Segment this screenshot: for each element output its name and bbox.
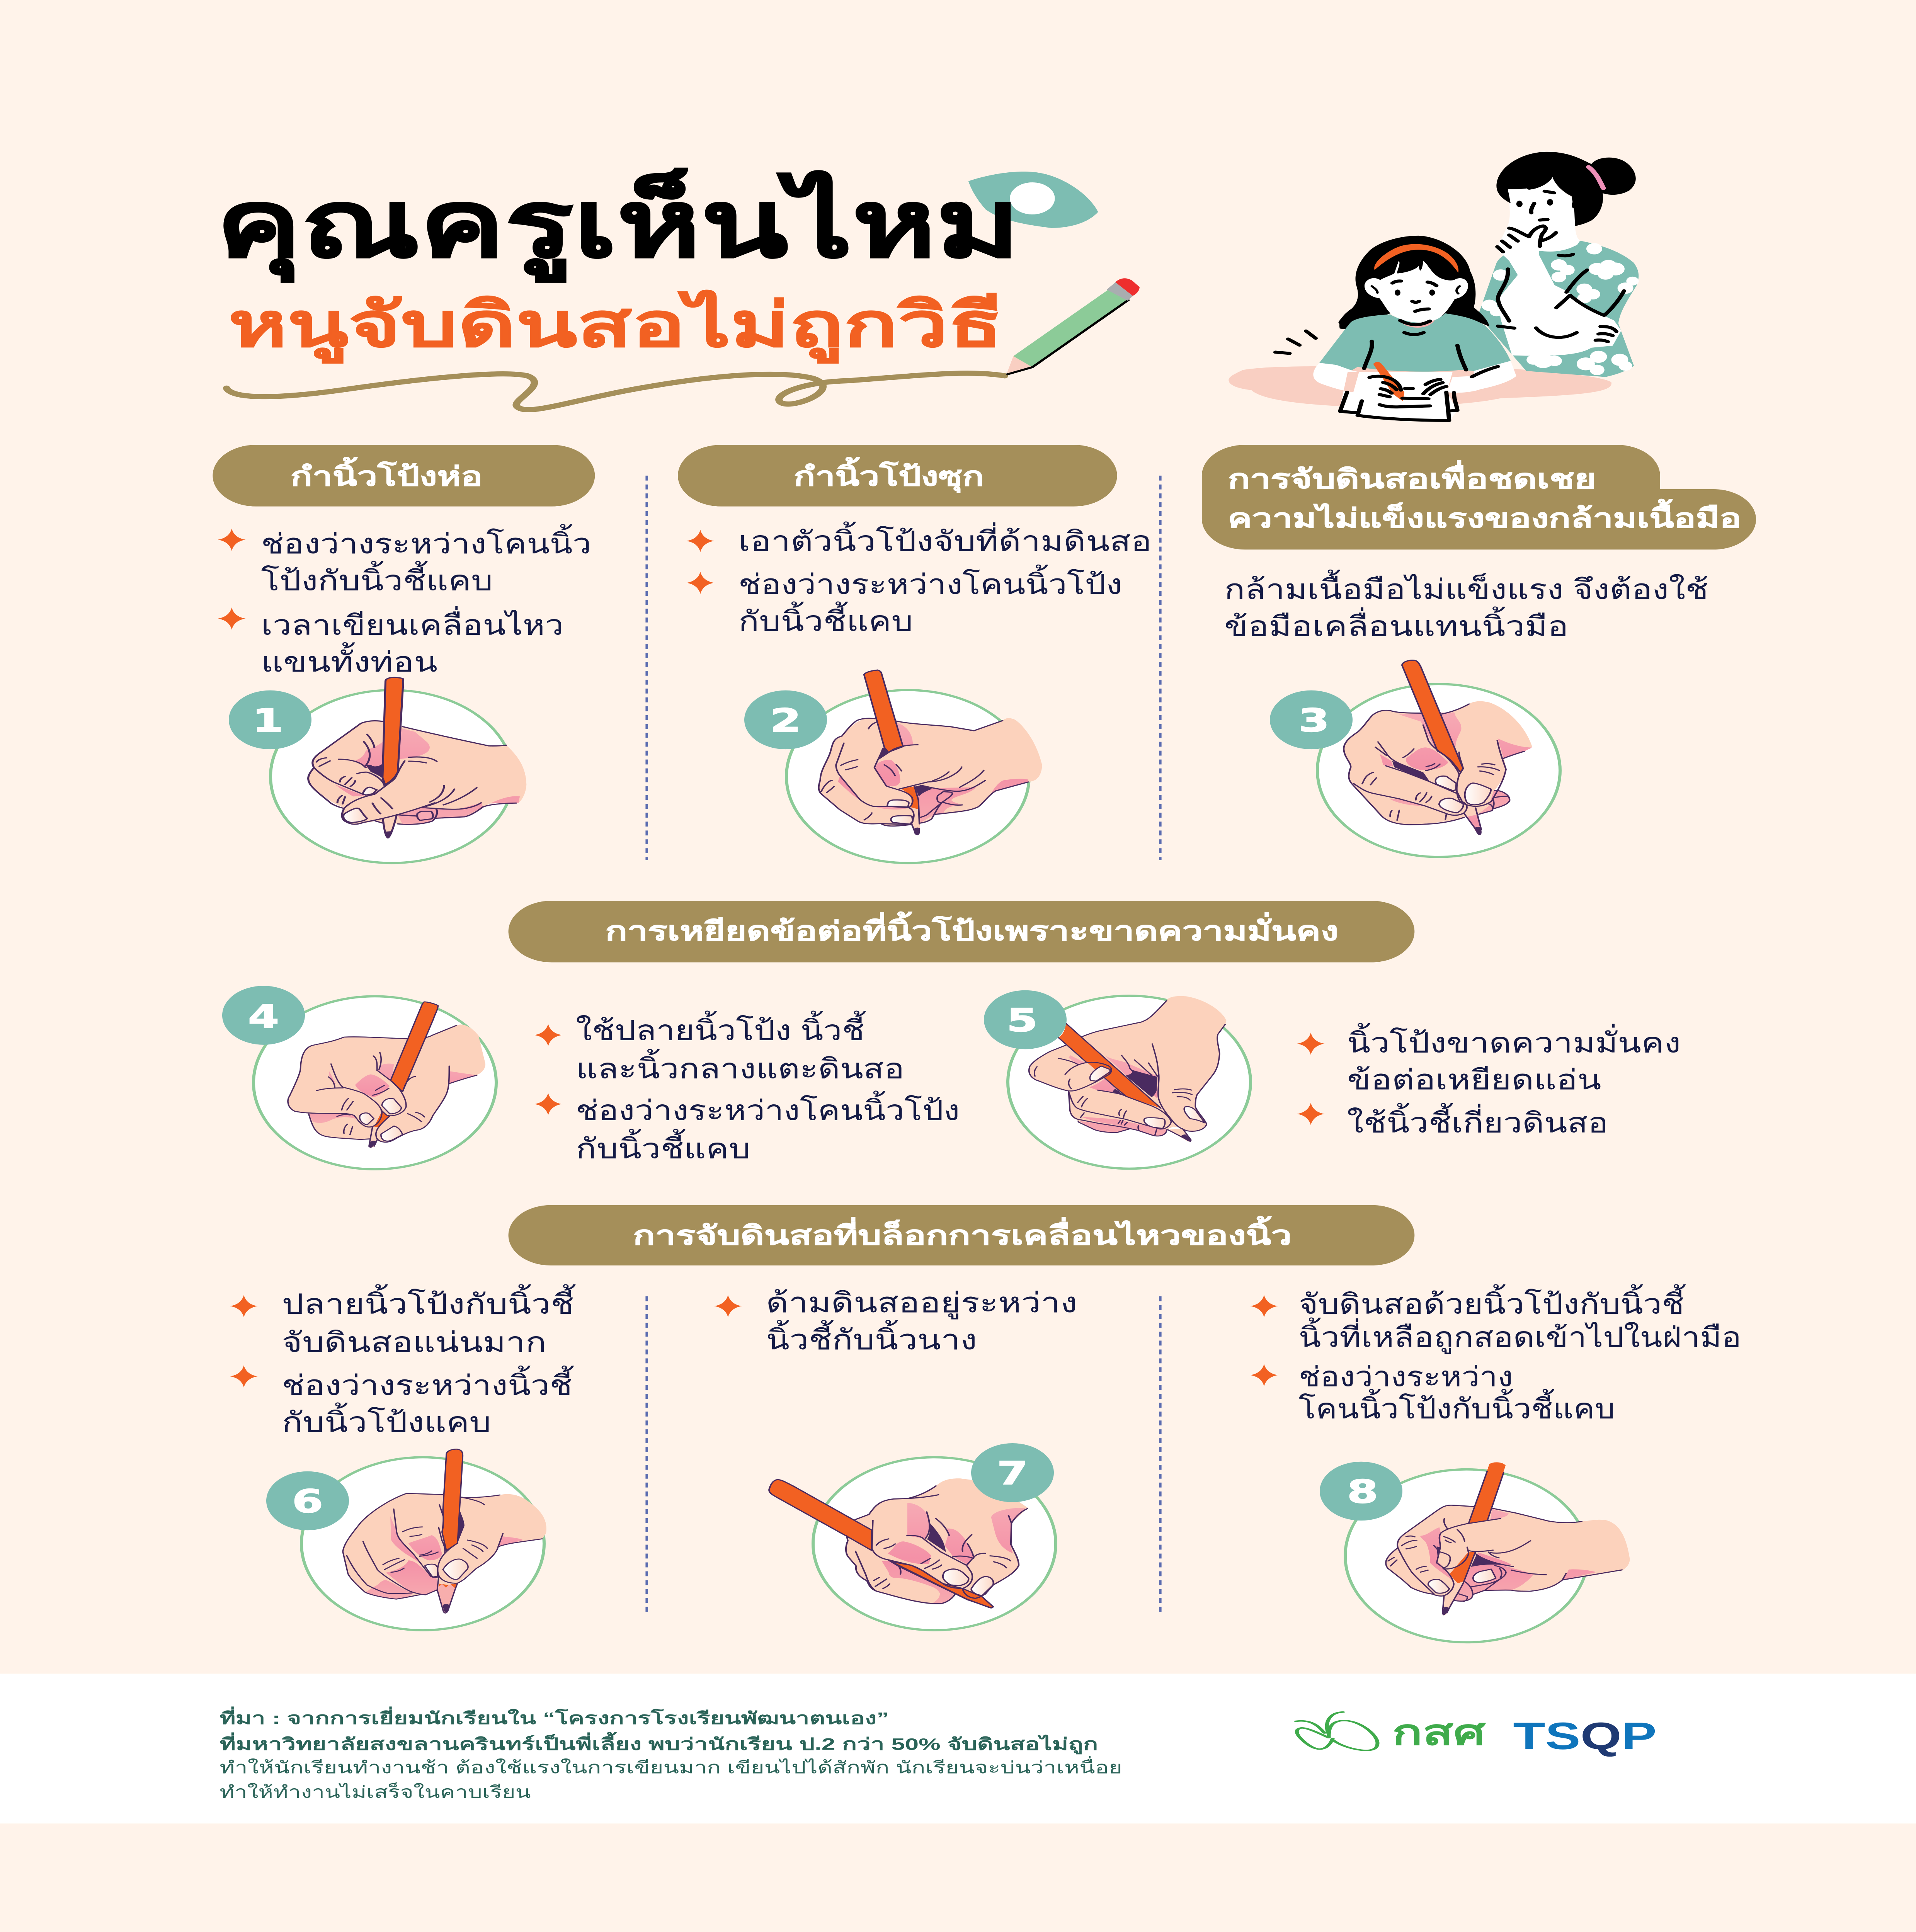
text: type 7 (714, 1287, 1077, 1355)
text: type 6: ปลายนิ้วโป้งกับนิ้วชี้ (282, 1284, 576, 1320)
hand drawing 1 (308, 677, 526, 838)
ring 1 (271, 690, 513, 863)
heading: type 3: ความไม่แข็งแรงของกล้ามเนื้อมือ (1228, 498, 1741, 533)
teacher (1478, 152, 1639, 377)
header: title block (216, 167, 1140, 410)
number badge 4: 4 (248, 998, 279, 1035)
hand 5 (984, 990, 1251, 1169)
text: type 4: และนิ้วกลางแตะดินสอ (576, 1049, 904, 1084)
text: type 7: นิ้วชี้กับนิ้วนาง (766, 1320, 977, 1355)
heading: type 1 (213, 445, 595, 507)
table shadow (1229, 366, 1611, 407)
illustration: teacher watching student (1229, 152, 1639, 420)
ring 3 (1317, 684, 1560, 857)
ring 6 (301, 1457, 544, 1630)
footer source text (220, 1706, 1122, 1801)
hand 2 (744, 670, 1042, 863)
text: type 2 (686, 521, 1152, 637)
student (1275, 236, 1516, 420)
squiggle line (226, 373, 1005, 410)
hand drawing 7 (769, 1478, 1028, 1608)
number badge 5: 5 (1007, 1002, 1038, 1039)
text: type 1: เวลาเขียนเคลื่อนไหว (261, 606, 564, 641)
text: type 3 (1224, 569, 1708, 642)
footer source text: ที่มหาวิทยาลัยสงขลานครินทร์เป็นพี่เลี้ยง พบว่านักเรียน ป.2 กว่า 50% จับดินสอไม่ถูก (220, 1731, 1098, 1755)
number badge 8 (1320, 1462, 1402, 1520)
text: type 1 (218, 524, 591, 678)
text: type 6: จับดินสอแน่นมาก (282, 1327, 546, 1358)
text: type 2: เอาตัวนิ้วโป้งจับที่ด้ามดินสอ (738, 521, 1152, 557)
text: type 6 (230, 1284, 576, 1438)
footer source text: ทำให้นักเรียนทำงานช้า ต้องใช้แรงในการเขียนมาก เขียนไปได้สักพัก นักเรียนจะบ่นว่าเหนื่อย (220, 1756, 1122, 1777)
number badge 7 (971, 1443, 1054, 1502)
text: type 8: โคนนิ้วโป้งกับนิ้วชี้แคบ (1298, 1389, 1615, 1424)
text: type 4: กับนิ้วชี้แคบ (576, 1129, 750, 1164)
number badge 3: 3 (1298, 702, 1329, 739)
text: type 3: ข้อมือเคลื่อนแทนนิ้วมือ (1224, 606, 1569, 642)
footer band (0, 1674, 1916, 1823)
heading: thumb joint hyperextension: การเหยียดข้อต่อที่นิ้วโป้งเพราะขาดความมั่นคง (605, 911, 1338, 946)
text: type 4: ใช้ปลายนิ้วโป้ง นิ้วชี้ (576, 1010, 866, 1046)
icon: eye (968, 172, 1098, 228)
hand 1 (229, 677, 526, 863)
number badge 6 (266, 1471, 349, 1530)
ring 2 (786, 690, 1029, 863)
ring 8 (1345, 1469, 1588, 1642)
text: type 8 (1250, 1284, 1741, 1424)
hand drawing 8 (1386, 1462, 1630, 1616)
column dividers (647, 476, 1160, 1612)
text: type 8: ช่องว่างระหว่าง (1298, 1361, 1513, 1392)
hand 6 (266, 1449, 546, 1630)
subtitle: หนูจับดินสอไม่ถูกวิธี (228, 290, 1003, 363)
number badge 8: 8 (1347, 1473, 1378, 1510)
text: type 7: ด้ามดินสออยู่ระหว่าง (766, 1287, 1077, 1320)
text: type 1: โป้งกับนิ้วชี้แคบ (261, 561, 493, 596)
footer source text: ทำให้ทำงานไม่เสร็จในคาบเรียน (220, 1782, 531, 1801)
hand 8 (1320, 1462, 1630, 1642)
text: type 8: จับดินสอด้วยนิ้วโป้งกับนิ้วชี้ (1298, 1284, 1686, 1320)
hand drawing 2 (819, 670, 1042, 835)
number badge 3 (1270, 690, 1353, 749)
ring 7 (813, 1457, 1056, 1630)
text: type 2: กับนิ้วชี้แคบ (738, 601, 913, 637)
footer source text: ที่มา : จากการเยี่ยมนักเรียนใน “โครงการโรงเรียนพัฒนาตนเอง” (220, 1706, 889, 1728)
heading: thumb joint hyperextension (509, 901, 1414, 963)
ring 5 (1008, 996, 1251, 1169)
text: type 2: ช่องว่างระหว่างโคนนิ้วโป้ง (738, 565, 1122, 600)
heading: type 2: กำนิ้วโป้งซุก (794, 457, 984, 493)
number badge 2: 2 (770, 702, 801, 739)
text: type 4 (534, 1010, 960, 1164)
logo icon: sprout (1296, 1712, 1377, 1750)
heading: type 2 (678, 445, 1117, 507)
number badge 4 (222, 986, 305, 1045)
text: type 8: นิ้วที่เหลือถูกสอดเข้าไปในฝ่ามือ (1298, 1317, 1741, 1354)
number badge 7: 7 (997, 1455, 1028, 1492)
number badge 5 (984, 990, 1067, 1049)
hand 7 (769, 1443, 1056, 1630)
number badge 6: 6 (292, 1483, 323, 1520)
title: คุณครูเห็นไหม (216, 167, 1020, 282)
text: type 6: ช่องว่างระหว่างนิ้วชี้ (282, 1366, 574, 1401)
text: type 3: กล้ามเนื้อมือไม่แข็งแรง จึงต้องใช้ (1224, 569, 1708, 605)
text: type 1: ช่องว่างระหว่างโคนนิ้ว (261, 524, 591, 559)
hand 4 (222, 986, 496, 1169)
heading: blocking finger movement: การจับดินสอที่บล็อกการเคลื่อนไหวของนิ้ว (633, 1216, 1292, 1250)
text: type 5: นิ้วโป้งขาดความมั่นคง (1347, 1023, 1681, 1058)
number badge 2 (744, 690, 827, 749)
text: type 1: แขนทั้งท่อน (261, 642, 437, 678)
hand drawing 4 (288, 1002, 485, 1148)
logo text: กสศ: กสศ (1392, 1713, 1486, 1752)
hand 3 (1270, 660, 1560, 857)
number badge 1: 1 (252, 702, 283, 739)
heading: type 3 (1202, 445, 1756, 549)
text: type 6: กับนิ้วโป้งแคบ (282, 1402, 491, 1438)
text: type 4: ช่องว่างระหว่างโคนนิ้วโป้ง (576, 1090, 960, 1126)
hand drawing 3 (1343, 660, 1532, 835)
text: type 5 (1297, 1023, 1681, 1138)
hand drawing 5 (1029, 996, 1227, 1141)
number badge 1 (229, 690, 311, 749)
logo text: TSQP: TSQP (1513, 1714, 1657, 1757)
hand drawing 6 (343, 1449, 546, 1613)
heading: type 1: กำนิ้วโป้งห่อ (291, 457, 482, 491)
icon: pencil (1006, 278, 1140, 374)
text: type 5: ใช้นิ้วชี้เกี่ยวดินสอ (1347, 1103, 1608, 1138)
heading: blocking finger movement (509, 1205, 1414, 1265)
section pills and text (213, 445, 1756, 1801)
heading: type 3: การจับดินสอเพื่อชดเชย (1228, 460, 1596, 494)
text: type 5: ข้อต่อเหยียดแอ่น (1347, 1064, 1601, 1095)
ring 4 (254, 996, 496, 1169)
